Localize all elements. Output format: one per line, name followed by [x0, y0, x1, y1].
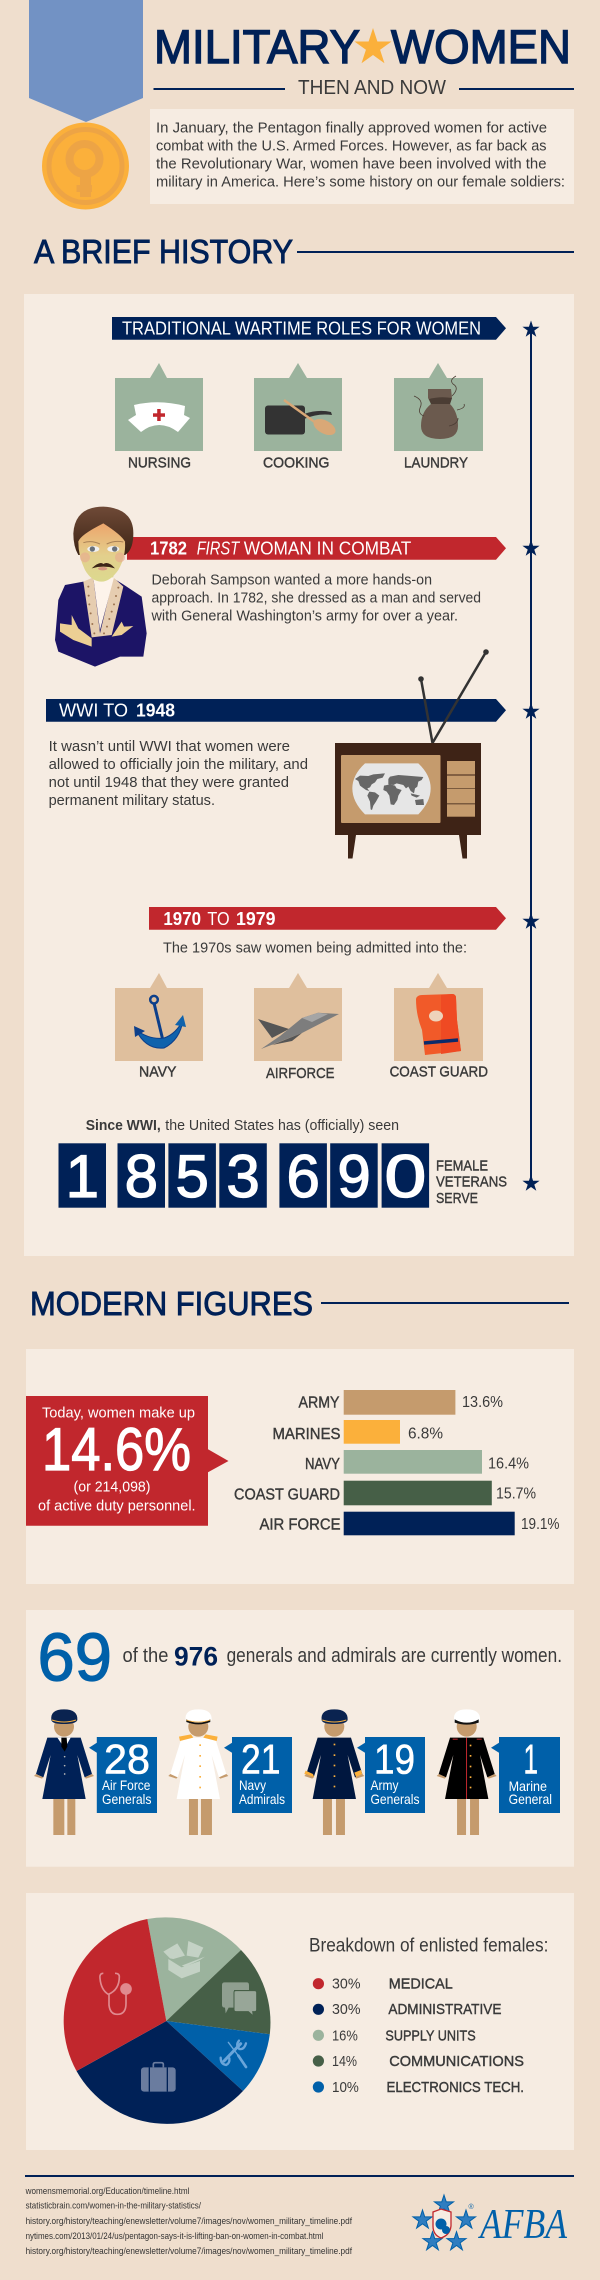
footer sources: nytimes.com/2013/01/24/us/pentagon-says-it-is-lifting-ban-on-women-in-combat.html — [26, 2231, 323, 2242]
icon card: laundry: LAUNDRY — [404, 454, 468, 471]
pie chart — [64, 1917, 270, 2124]
banner: 1782 first woman in combat — [127, 537, 506, 560]
legend: breakdown of enlisted females: COMMUNICATIONS — [389, 2053, 524, 2070]
text: Deborah Sampson: with General Washington’s army for over a year. — [151, 608, 458, 624]
logo: AFBA — [413, 2195, 567, 2250]
subtitle: THEN AND NOW — [298, 77, 446, 99]
legend: breakdown of enlisted females: 16% — [332, 2027, 358, 2044]
callout: 28 air force generals: Generals — [102, 1791, 152, 1807]
counter: 1,853,690 female veterans: FEMALE — [436, 1158, 488, 1175]
text: Deborah Sampson — [151, 572, 481, 624]
legend: breakdown of enlisted females: ELECTRONICS TECH. — [386, 2079, 524, 2096]
counter: 1,853,690 female veterans: 6 — [287, 1143, 320, 1210]
icon card: air force: AIRFORCE — [266, 1065, 334, 1082]
callout: 14.6%: of active duty personnel. — [38, 1498, 196, 1515]
callout: 19 army generals: Generals — [370, 1791, 420, 1807]
legend: breakdown of enlisted females: MEDICAL — [389, 1975, 453, 1992]
text: the 1970s: The 1970s saw women being admitted into the: — [163, 940, 467, 957]
intro text block: In January, the Pentagon finally approved women for active — [156, 120, 547, 136]
callout: 14.6%: 14.6% — [42, 1416, 191, 1483]
callout: 19 army generals: Army — [370, 1777, 398, 1793]
banner: 1970 to 1979 — [149, 907, 506, 930]
callout: 28 air force generals: Air Force — [102, 1777, 151, 1793]
bar chart: COAST GUARD — [234, 1486, 340, 1503]
text: WWI to 1948: not until 1948 that they were granted — [49, 774, 289, 791]
legend: breakdown of enlisted females: Breakdown of enlisted females: — [309, 1936, 548, 1957]
banner: traditional wartime roles: TRADITIONAL WARTIME ROLES FOR WOMEN — [122, 318, 481, 338]
callout: 21 navy admirals: 21 — [241, 1735, 280, 1782]
figure: army general — [304, 1709, 364, 1835]
banner: 1970 to 1979: TO — [207, 909, 230, 929]
figure: navy admiral — [168, 1709, 228, 1835]
legend: breakdown of enlisted females: 30% — [332, 2001, 360, 2018]
medal ribbon and female-symbol medal — [29, 0, 143, 210]
bar chart — [234, 1390, 560, 1535]
headline: 69 of the 976: 69 — [38, 1620, 112, 1696]
bar chart: 15.7% — [496, 1486, 536, 1503]
bar chart: 6.8% — [408, 1425, 443, 1442]
banner: 1970 to 1979: 1979 — [236, 909, 276, 929]
bar chart: NAVY — [305, 1456, 340, 1473]
banner: 1782 first woman in combat: FIRST — [197, 538, 241, 558]
text: WWI to 1948: It wasn’t until WWI that women were — [49, 738, 290, 755]
icon card: coast guard: COAST GUARD — [390, 1064, 488, 1081]
callout: 14.6%: (or 214,098) — [74, 1479, 151, 1496]
intro text block: the Revolutionary War, women have been involved with the — [156, 156, 546, 172]
headline: 69 of the 976 — [38, 1620, 562, 1696]
intro text block: combat with the U.S. Armed Forces. However, as far back as — [156, 138, 546, 154]
text: WWI to 1948: permanent military status. — [49, 792, 215, 809]
icon card: air force — [254, 973, 342, 1082]
heading: modern figures: MODERN FIGURES — [30, 1285, 313, 1322]
counter: 1,853,690 female veterans: 0 — [384, 1143, 426, 1210]
icon card: navy — [115, 973, 203, 1081]
headline: 69 of the 976: 976 — [174, 1642, 218, 1672]
figure: marine general — [437, 1709, 497, 1835]
legend: breakdown of enlisted females: ADMINISTRATIVE — [388, 2001, 501, 2018]
title — [154, 21, 571, 74]
legend: breakdown of enlisted females: 30% — [332, 1975, 360, 1992]
counter: 1,853,690 female veterans — [58, 1143, 507, 1210]
callout: 14.6% — [26, 1396, 228, 1526]
icon: box — [163, 1941, 205, 1978]
counter: 1,853,690 female veterans: VETERANS — [436, 1174, 507, 1191]
banner: WWI to 1948 — [46, 699, 506, 722]
callout: 28 air force generals: 28 — [104, 1735, 150, 1782]
intro text block — [150, 109, 574, 204]
callout: 1 marine general: 1 — [524, 1735, 538, 1782]
banner: 1782 first woman in combat: WOMAN IN COMBAT — [244, 538, 411, 558]
illustration: Deborah Sampson — [55, 507, 147, 667]
callout: 21 navy admirals: Navy — [239, 1777, 266, 1793]
counter: 1,853,690 female veterans: 5 — [176, 1143, 209, 1210]
bar chart: AIR FORCE — [260, 1516, 340, 1533]
footer sources: statisticbrain.com/women-in-the-military-statistics/ — [26, 2201, 201, 2212]
footer sources: history.org/history/teaching/enewsletter/volume7/images/nov/women_military_timeline.pdf — [26, 2216, 352, 2227]
logo: AFBA: ® — [468, 2203, 474, 2211]
callout: 19 army generals: 19 — [374, 1735, 415, 1782]
legend: breakdown of enlisted females: SUPPLY UNITS — [385, 2027, 476, 2044]
text: since WWI: the United States has (officially) seen — [165, 1117, 399, 1134]
panel: enlisted breakdown — [26, 1893, 574, 2150]
headline: 69 of the 976: of the — [122, 1645, 168, 1667]
illustration: television with world map — [335, 649, 489, 858]
callout: 21 navy admirals — [224, 1735, 292, 1813]
bar chart: 16.4% — [488, 1455, 529, 1472]
figure: air force general — [34, 1709, 94, 1835]
text: Deborah Sampson: approach. In 1782, she dressed as a man and served — [152, 590, 481, 606]
icon card: nursing: NURSING — [128, 454, 191, 471]
bar chart: 13.6% — [462, 1394, 503, 1411]
icon: stethoscope — [100, 1973, 131, 2014]
text: WWI to 1948 — [49, 738, 308, 809]
callout: 28 air force generals — [89, 1735, 157, 1813]
icon card: cooking: COOKING — [263, 454, 330, 471]
banner: 1970 to 1979: 1970 — [163, 909, 201, 929]
panel: active duty share — [26, 1349, 574, 1584]
counter: 1,853,690 female veterans: 3 — [226, 1143, 260, 1210]
bar chart: 19.1% — [521, 1516, 560, 1533]
legend: breakdown of enlisted females: 14% — [332, 2053, 357, 2070]
callout: 1 marine general: Marine — [509, 1778, 547, 1794]
banner: 1782 first woman in combat: 1782 — [150, 538, 187, 558]
logo: AFBA: AFBA — [477, 2202, 567, 2248]
heading: a brief history: A BRIEF HISTORY — [34, 234, 293, 271]
footer sources — [25, 2175, 574, 2257]
callout: 21 navy admirals: Admirals — [239, 1791, 285, 1807]
bar chart: ARMY — [298, 1395, 340, 1412]
icon: briefcase — [141, 2063, 176, 2092]
intro text block: military in America. Here’s some history on our female soldiers: — [156, 174, 565, 190]
banner: WWI to 1948: 1948 — [136, 700, 175, 720]
legend: breakdown of enlisted females — [309, 1936, 548, 2096]
icon card: laundry — [394, 363, 483, 471]
footer sources: womensmemorial.org/Education/timeline.html — [25, 2186, 189, 2197]
timeline line with stars — [523, 322, 539, 1190]
counter: 1,853,690 female veterans: 8 — [125, 1143, 158, 1210]
panel: generals and admirals — [26, 1610, 574, 1867]
callout: 19 army generals — [357, 1735, 425, 1813]
callout: 1 marine general: General — [509, 1791, 552, 1807]
icon card: cooking — [254, 363, 342, 471]
footer sources: history.org/history/teaching/enewsletter/volume7/images/nov/women_military_timeline.pdf — [26, 2246, 352, 2257]
text: WWI to 1948: allowed to officially join the military, and — [49, 756, 308, 773]
legend: breakdown of enlisted females: 10% — [332, 2079, 359, 2096]
icon card: nursing — [115, 363, 203, 471]
icon card: navy: NAVY — [139, 1064, 176, 1081]
counter: 1,853,690 female veterans: 1 — [66, 1143, 99, 1210]
bar chart: MARINES — [272, 1426, 340, 1443]
text: since WWI: Since WWI, — [86, 1117, 161, 1134]
callout: 14.6%: Today, women make up — [42, 1404, 195, 1421]
icon: speech bubbles — [222, 1982, 257, 2016]
icon: wrench and screwdriver — [221, 2041, 246, 2067]
icon card: coast guard — [390, 973, 488, 1081]
title: WOMEN — [391, 21, 571, 74]
callout: 1 marine general — [491, 1735, 560, 1813]
text: Deborah Sampson: Deborah Sampson wanted a more hands-on — [152, 572, 432, 588]
panel: brief history timeline — [24, 294, 574, 1256]
counter: 1,853,690 female veterans: SERVE — [436, 1190, 478, 1207]
banner: WWI to 1948: WWI TO — [59, 700, 128, 720]
title: MILITARY — [154, 21, 360, 74]
counter: 1,853,690 female veterans: 9 — [337, 1143, 371, 1210]
